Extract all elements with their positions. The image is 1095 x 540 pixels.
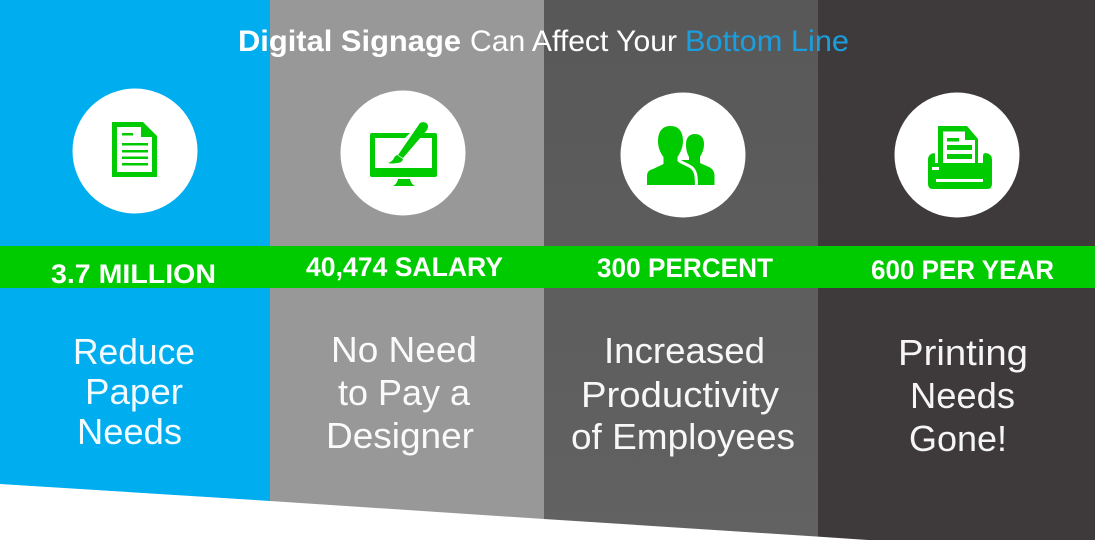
text: printing needs gone: [898, 332, 1028, 459]
text: reduce paper needs: Paper: [85, 371, 183, 412]
stat: 300 percent: 300 PERCENT: [597, 253, 773, 283]
panel: blue column: [0, 0, 270, 540]
stat: 40,474 salary: 40,474 SALARY: [306, 252, 503, 282]
text: printing needs gone: Needs: [910, 375, 1015, 416]
icon: monitor with paintbrush: [340, 90, 466, 216]
panel: medium gray column: [544, 0, 818, 540]
text: no need to pay a designer: [326, 329, 477, 456]
icon: printer: [894, 92, 1020, 218]
title: Digital Signage: [238, 25, 461, 58]
text: reduce paper needs: Needs: [77, 411, 182, 452]
panel: light gray column: [270, 0, 544, 540]
stat: 600 per year: 600 PER YEAR: [871, 255, 1054, 285]
text: printing needs gone: Gone!: [909, 418, 1007, 459]
text: increased productivity of employees: Productivity: [581, 374, 779, 415]
text: increased productivity of employees: of Employees: [571, 416, 795, 457]
title: [238, 25, 849, 58]
text: no need to pay a designer: No Need: [331, 329, 477, 370]
green band: [0, 246, 1095, 288]
text: increased productivity of employees: Increased: [604, 330, 765, 371]
text: reduce paper needs: Reduce: [73, 331, 195, 372]
text: no need to pay a designer: to Pay a: [338, 372, 471, 413]
angled white bottom edge: [0, 484, 868, 540]
icon: document: [72, 88, 198, 214]
text: printing needs gone: Printing: [898, 332, 1028, 373]
icon: two people: [620, 92, 746, 218]
panel: dark column: [818, 0, 1095, 540]
text: increased productivity of employees: [571, 330, 795, 457]
stat: 3.7 million: 3.7 MILLION: [51, 259, 216, 289]
text: no need to pay a designer: Designer: [326, 415, 474, 456]
text: reduce paper needs: [73, 331, 195, 452]
title: Can Affect Your: [470, 25, 677, 58]
title: Bottom Line: [685, 25, 849, 58]
